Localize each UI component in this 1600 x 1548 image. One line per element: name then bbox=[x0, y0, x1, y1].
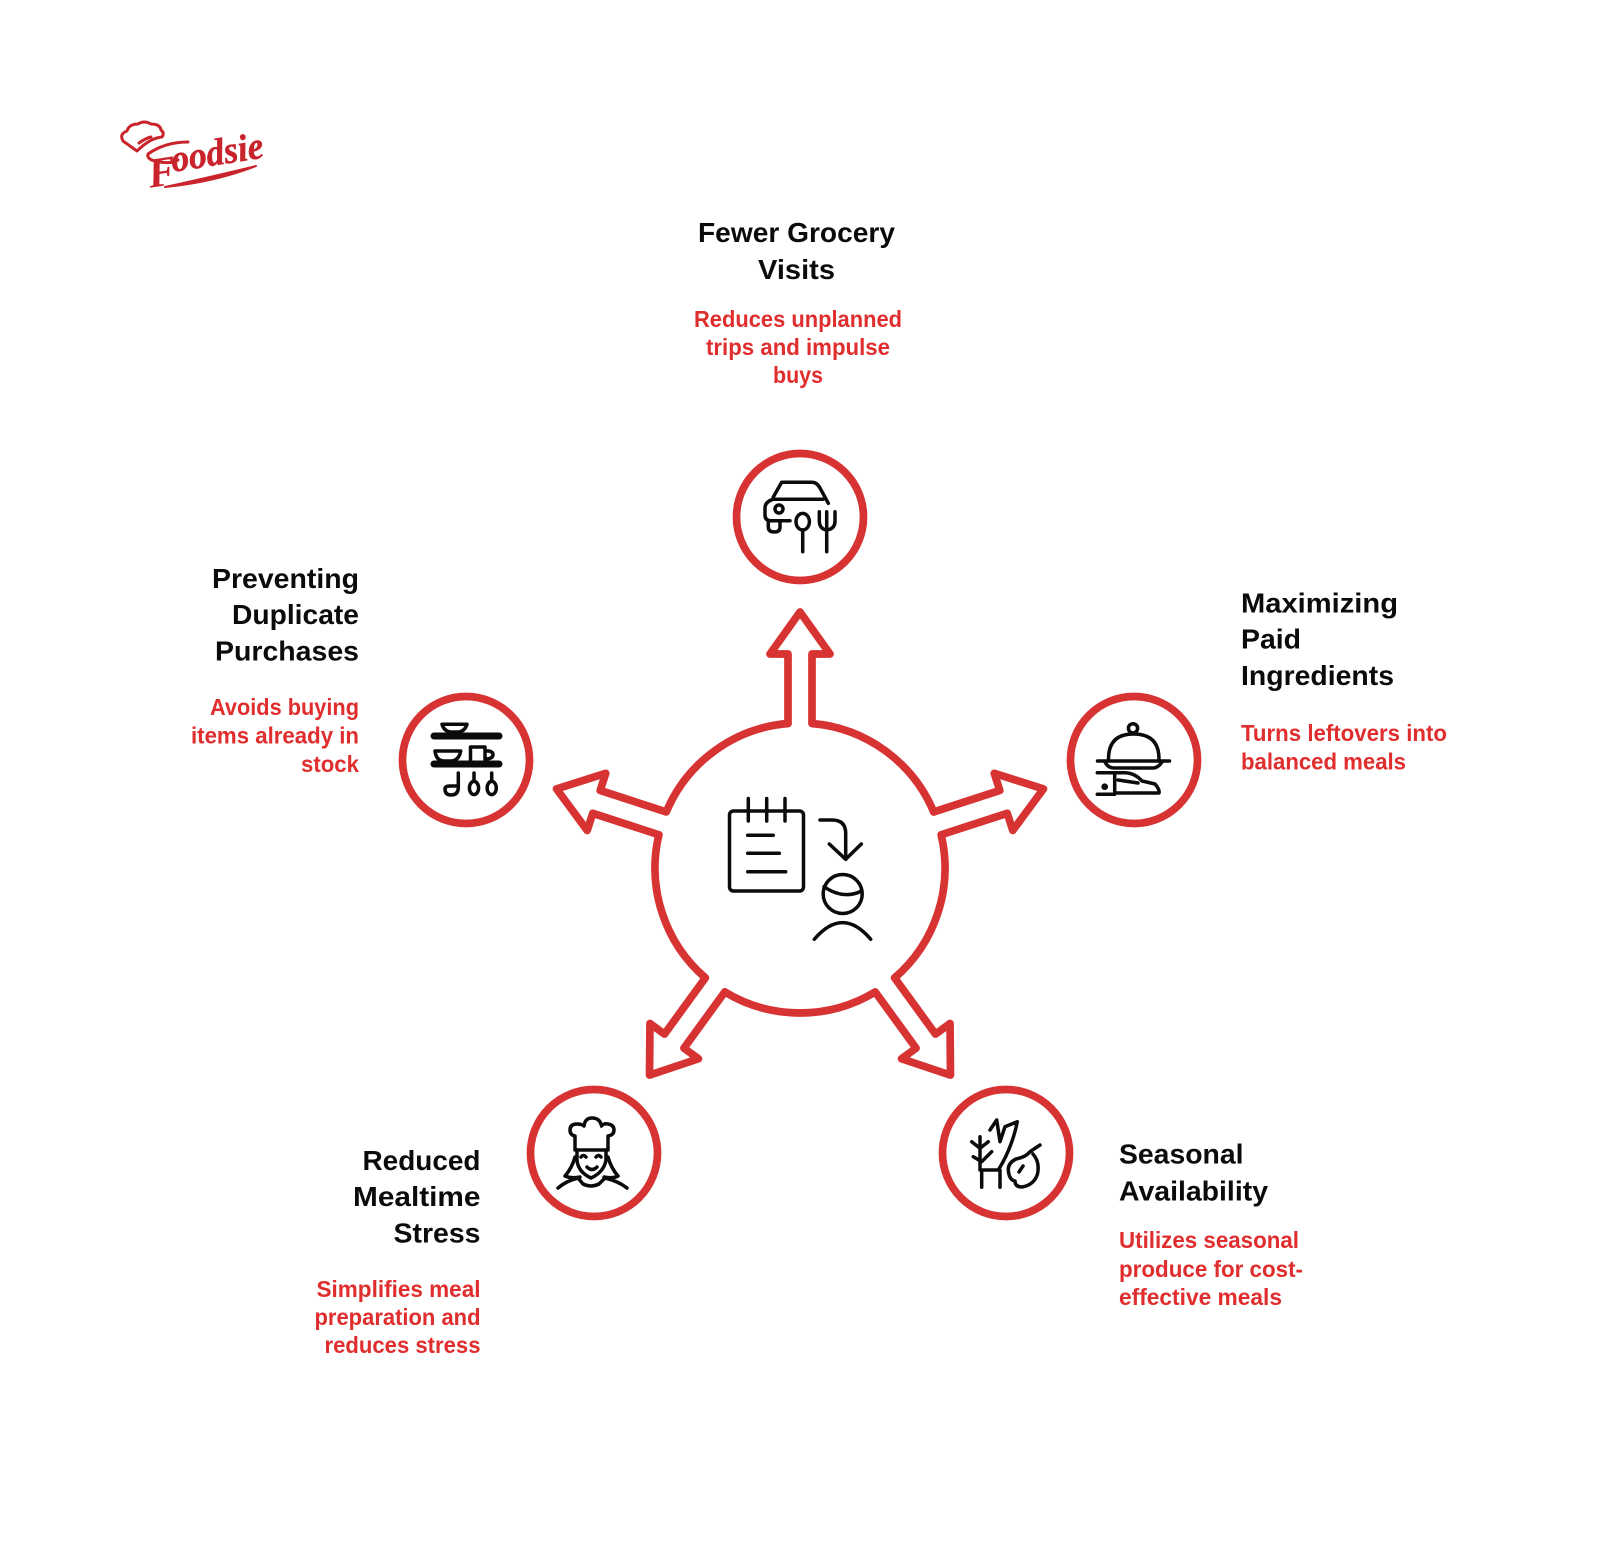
logo wordmark: oodsie bbox=[168, 125, 266, 181]
heading bbox=[212, 563, 359, 666]
description: Simplifies meal bbox=[316, 1276, 480, 1302]
description: Reduces unplanned bbox=[694, 306, 902, 332]
description: Avoids buying bbox=[210, 694, 359, 720]
logo F swoosh bbox=[148, 142, 188, 163]
heading: Maximizing bbox=[1241, 588, 1398, 618]
description: trips and impulse bbox=[706, 334, 890, 360]
description bbox=[1241, 720, 1447, 774]
heading: Fewer Grocery bbox=[698, 217, 895, 248]
arrow: upper right bbox=[844, 760, 1085, 978]
description: preparation and bbox=[314, 1304, 480, 1330]
arrow: upper left bbox=[547, 662, 788, 879]
arrow: lower right bbox=[725, 896, 975, 1154]
heading: Seasonal bbox=[1119, 1138, 1244, 1170]
icon: chef bbox=[558, 1118, 627, 1188]
logo underline bbox=[165, 166, 256, 187]
icon circle bbox=[736, 454, 864, 580]
heading bbox=[1119, 1138, 1268, 1206]
panel: reduced mealtime stress bbox=[314, 1090, 658, 1358]
logo: Foodsie bbox=[122, 122, 268, 198]
panel: maximizing paid ingredients bbox=[1070, 588, 1447, 824]
icon circle bbox=[530, 1090, 658, 1216]
icon circle bbox=[402, 696, 530, 824]
heading: Paid bbox=[1241, 624, 1301, 654]
arrow: lower left bbox=[541, 835, 791, 1093]
heading: Stress bbox=[394, 1218, 480, 1248]
heading bbox=[698, 217, 895, 285]
icon circle bbox=[942, 1090, 1070, 1216]
icon: central notebook to person bbox=[730, 798, 871, 939]
description: effective meals bbox=[1119, 1284, 1282, 1310]
logo wordmark: F bbox=[144, 148, 179, 198]
icon: chef hat bbox=[122, 122, 163, 151]
heading: Ingredients bbox=[1241, 660, 1394, 691]
description bbox=[314, 1276, 480, 1358]
icon: serving cloche bbox=[1097, 724, 1170, 794]
curved arrow bbox=[820, 820, 861, 859]
description bbox=[191, 694, 359, 777]
heading bbox=[353, 1145, 480, 1248]
icon: seasonal produce bbox=[972, 1120, 1040, 1187]
heading: Availability bbox=[1119, 1176, 1268, 1206]
description bbox=[1119, 1227, 1303, 1310]
panel: preventing duplicate purchases bbox=[191, 563, 530, 824]
description: items already in bbox=[191, 722, 359, 748]
heading: Mealtime bbox=[353, 1181, 480, 1212]
icon circle bbox=[1070, 696, 1198, 824]
description: Turns leftovers into bbox=[1241, 720, 1447, 746]
description: produce for cost- bbox=[1119, 1256, 1303, 1282]
heading: Reduced bbox=[362, 1145, 480, 1176]
arrow: up bbox=[770, 612, 934, 812]
panel: seasonal availability bbox=[942, 1090, 1303, 1310]
icon: kitchen shelves bbox=[434, 724, 499, 795]
heading: Duplicate bbox=[232, 599, 359, 630]
icon: car with cutlery bbox=[765, 482, 835, 552]
heading: Visits bbox=[758, 254, 835, 285]
heading bbox=[1241, 588, 1398, 691]
heading: Preventing bbox=[212, 563, 359, 594]
description: reduces stress bbox=[324, 1332, 480, 1358]
heading: Purchases bbox=[215, 636, 359, 666]
central hub with five arrows bbox=[541, 612, 1085, 1154]
description: Utilizes seasonal bbox=[1119, 1227, 1299, 1253]
description: buys bbox=[773, 362, 823, 388]
panel: fewer grocery visits bbox=[694, 217, 902, 580]
description: balanced meals bbox=[1241, 748, 1406, 774]
notebook bbox=[730, 798, 804, 891]
person bbox=[814, 874, 871, 939]
description: stock bbox=[301, 751, 359, 777]
description bbox=[694, 306, 902, 388]
